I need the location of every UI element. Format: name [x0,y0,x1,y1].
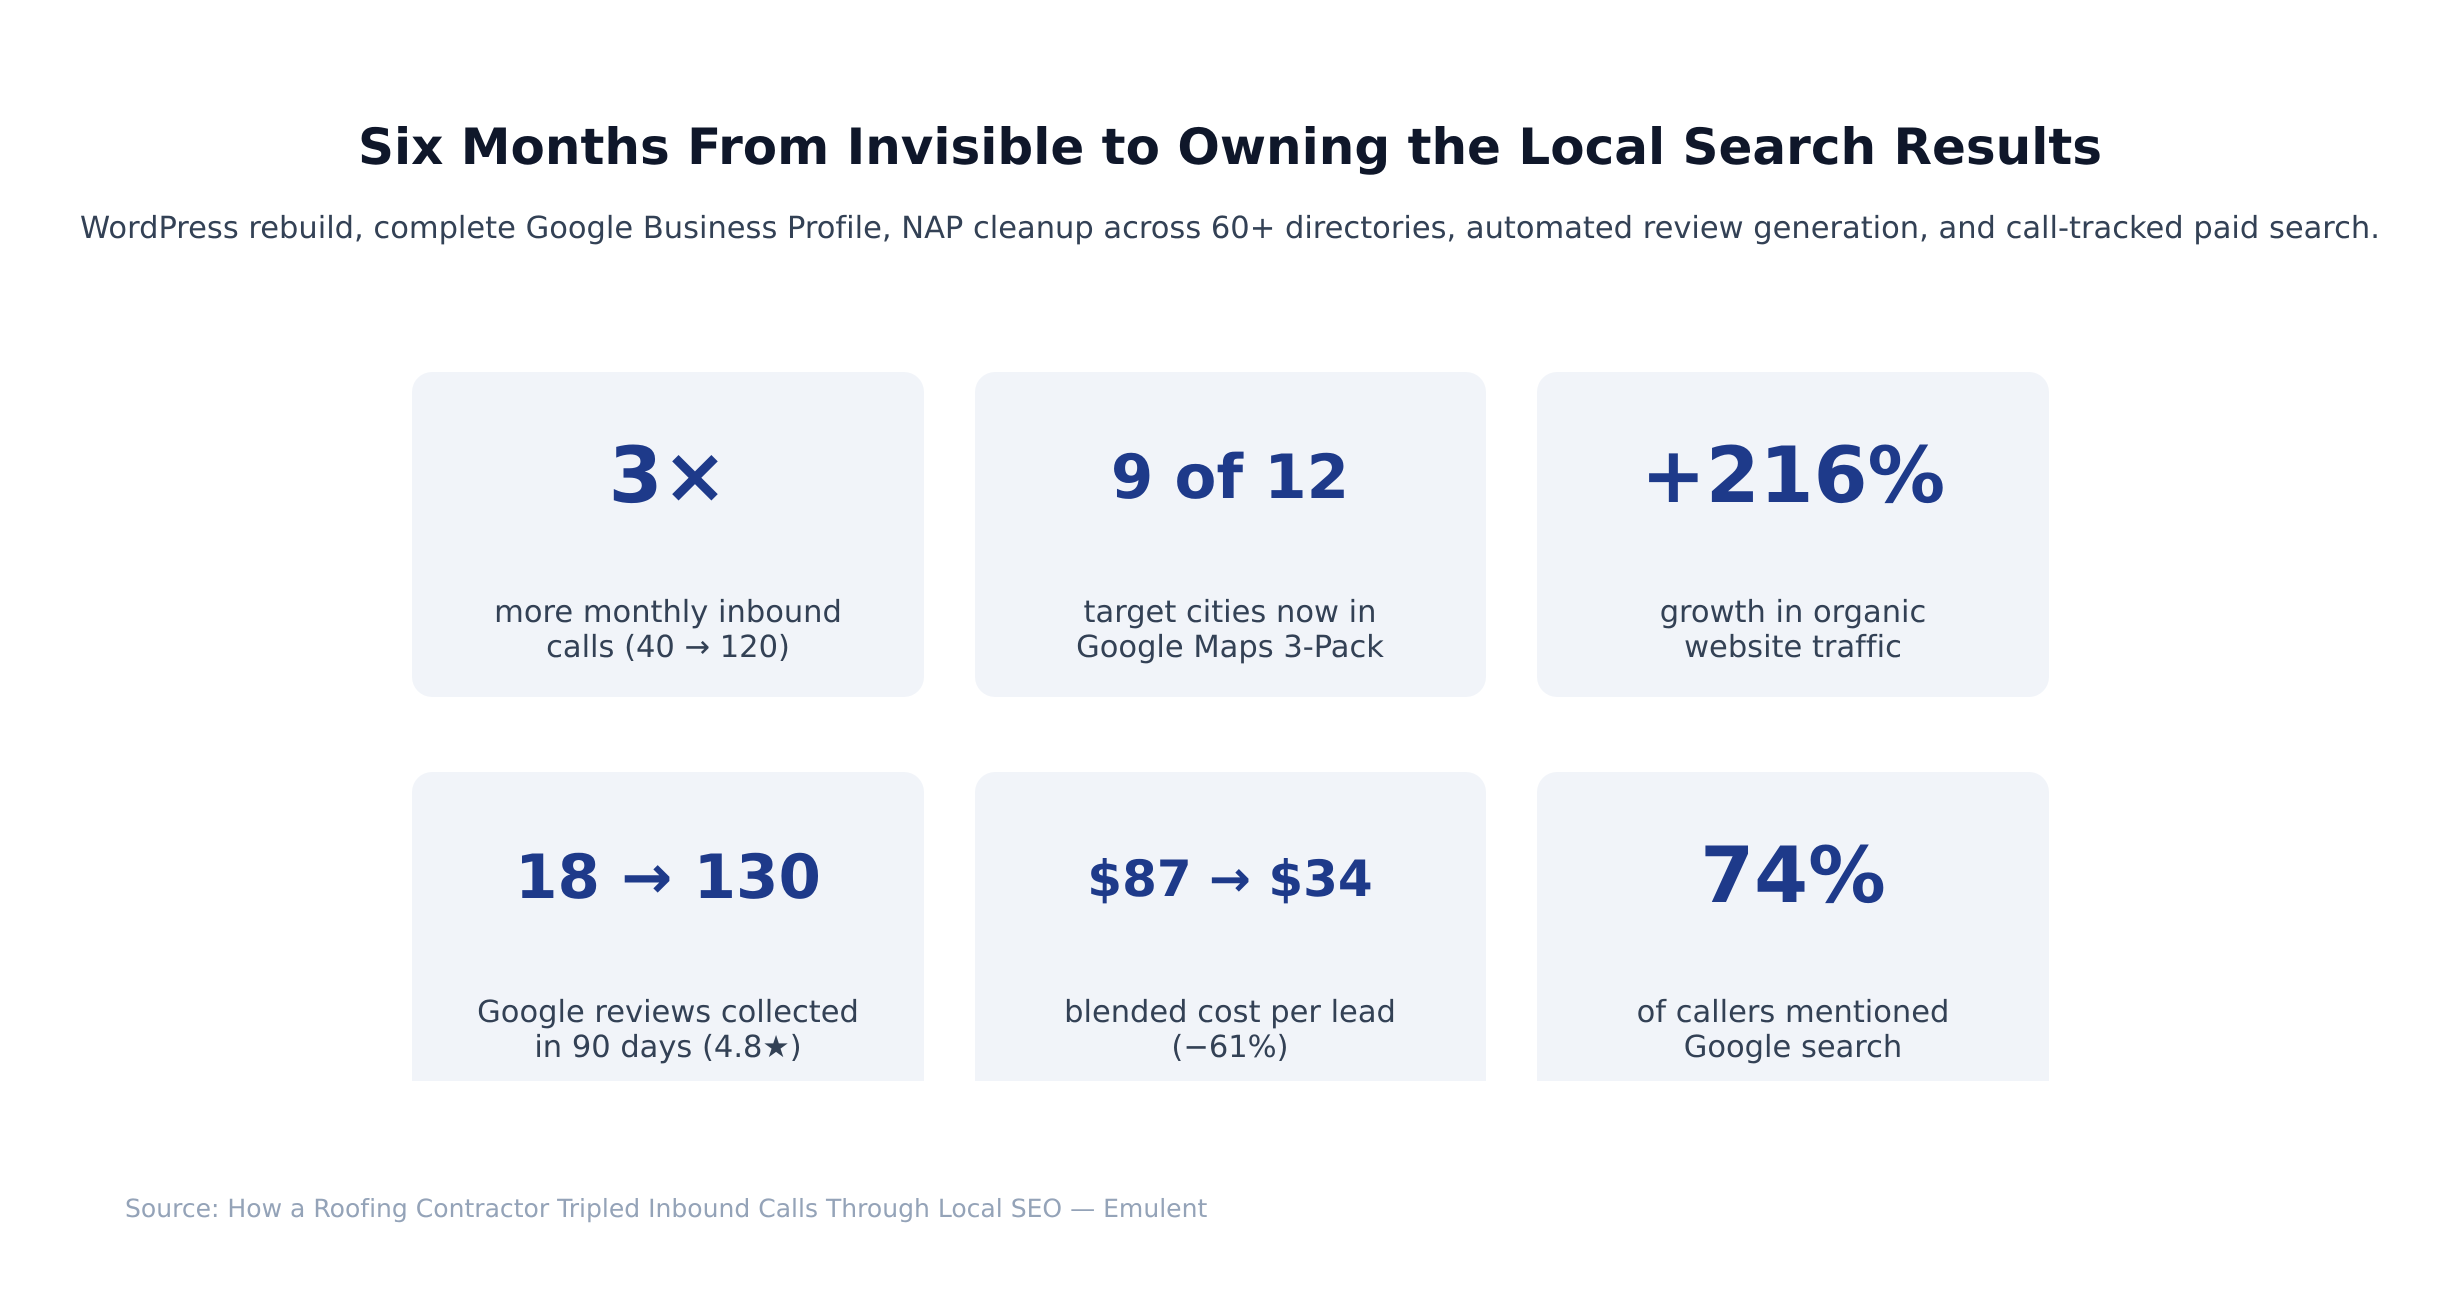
stat label: callers: Google search [1684,1030,1902,1065]
stat label: target cities [1076,594,1384,665]
stat value: +216%: +216% [1641,431,1945,521]
stat label: target cities: target cities now in [1084,594,1376,630]
stat label: cost per lead [1064,995,1396,1065]
stat value: 74%: 74% [1700,831,1886,921]
stat label: inbound calls [494,594,842,665]
stat label: target cities: Google Maps 3-Pack [1076,630,1384,665]
stat label: cost per lead: (−61%) [1171,1030,1289,1065]
stat value: $87 to $34: $87 → $34 [1087,850,1373,908]
subtitle: WordPress rebuild, complete Google Business Profile, NAP cleanup across 60+ directories, automated review generation, and call-tracked paid search. [80,211,2380,246]
panel: inbound calls [412,372,924,697]
stat label: organic traffic: website traffic [1684,630,1902,665]
stat label: inbound calls: calls (40 → 120) [546,630,790,665]
stat label: inbound calls: more monthly inbound [494,594,842,630]
source note: Source: How a Roofing Contractor Tripled Inbound Calls Through Local SEO — Emulent [125,1194,1207,1223]
stat value: 9 of 12: 9 of 12 [1111,442,1349,512]
stat label: callers: of callers mentioned [1637,995,1949,1030]
stat label: reviews [477,995,859,1065]
title: Six Months From Invisible to Owning the Local Search Results [358,118,2102,176]
panel: callers [1537,772,2049,1081]
stat value: 18 to 130: 18 → 130 [515,842,821,912]
stat label: organic traffic: growth in organic [1660,594,1926,630]
panel: reviews [412,772,924,1081]
stat label: reviews: in 90 days (4.8★) [534,1030,802,1065]
stat label: callers [1637,995,1949,1065]
stat label: reviews: Google reviews collected [477,995,859,1030]
panel: organic traffic [1537,372,2049,697]
panel: target cities [974,372,1486,697]
stat value: 3x: 3× [609,431,727,521]
stat label: cost per lead: blended cost per lead [1064,995,1396,1030]
panel: cost per lead [974,772,1486,1081]
stat label: organic traffic [1660,594,1926,665]
